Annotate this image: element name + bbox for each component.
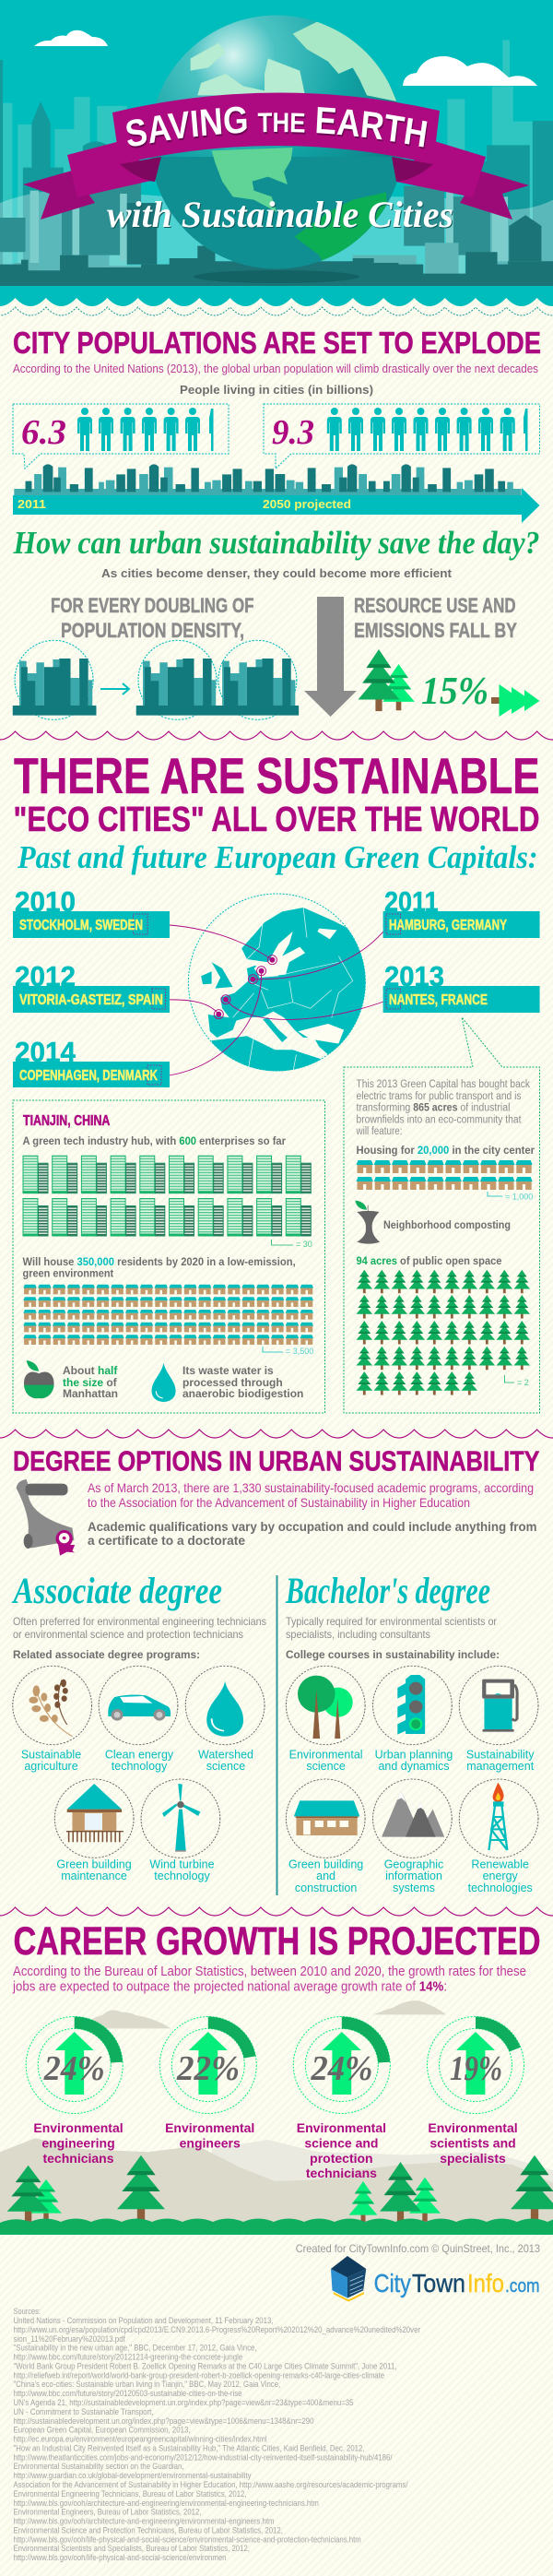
housing statement: Housing for 20,000 in the city center bbox=[356, 1144, 535, 1157]
job label 3: Environmental bbox=[297, 2120, 386, 2135]
logo bbox=[331, 2256, 540, 2302]
icon: apple core bbox=[355, 1201, 380, 1244]
career intro bbox=[12, 1965, 526, 1994]
label: sustainability management bbox=[466, 1749, 535, 1773]
icon: water drop bbox=[152, 1363, 176, 1402]
sources: http://www.bbc.com/future/story/20120503-sustainable-cities-on-the-rise bbox=[13, 2388, 241, 2398]
ring: 24 percent science technicians: 24% bbox=[311, 2049, 372, 2088]
apple text: Manhattan bbox=[63, 1387, 118, 1400]
job label 2 bbox=[165, 2120, 254, 2151]
apple text bbox=[63, 1364, 118, 1400]
map of Europe bbox=[188, 894, 367, 1073]
associate description bbox=[13, 1615, 266, 1641]
sources: http://www.bls.gov/ooh/architecture-and-engineering/environmental-engineers.htm bbox=[13, 2516, 275, 2525]
label: urban planning bbox=[375, 1749, 453, 1773]
icon: oil derrick with flame bbox=[459, 1779, 538, 1858]
sources: European Green Capital, European Commission, 2013, bbox=[13, 2424, 190, 2435]
label: environmental science: science bbox=[306, 1760, 346, 1773]
title: SAVING THE EARTH bbox=[126, 107, 428, 149]
clouds bbox=[34, 30, 537, 86]
icon: fuel pump bbox=[459, 1666, 538, 1745]
associate heading: Associate degree bbox=[11, 1570, 222, 1611]
heading bbox=[13, 747, 540, 839]
icon: trees bbox=[286, 1666, 365, 1745]
sources: Environmental Scientists and Specialists, Bureau of Labor Statistics, 2012, bbox=[13, 2543, 250, 2553]
green capital 2012: VITORIA-GASTEIZ, SPAIN bbox=[19, 992, 163, 1008]
label: green building construction: construction bbox=[295, 1882, 357, 1894]
icon: diploma scroll bbox=[17, 1479, 75, 1556]
logo wordmark bbox=[374, 2269, 540, 2297]
header: city skyline, globe and title ribbon bbox=[0, 0, 553, 306]
skyline bbox=[0, 40, 553, 286]
house legend bbox=[263, 1347, 313, 1356]
sources: Environmental Engineering Technicians, Bureau of Labor Statistics, 2012, bbox=[13, 2488, 247, 2499]
label: agriculture: Sustainable bbox=[21, 1749, 81, 1762]
section: city populations: 2050 projected bbox=[263, 497, 351, 511]
icon: half apple bbox=[24, 1360, 54, 1398]
house pictogram bbox=[23, 1285, 313, 1345]
green capital 2011: 2011 bbox=[384, 885, 439, 918]
Nantes description bbox=[356, 1079, 530, 1137]
water text bbox=[182, 1364, 303, 1400]
sources: "World Bank Group President Robert B. Zoellick Opening Remarks at the C40 Large Cities Climate Summit", June 2011, bbox=[13, 2361, 396, 2370]
housing pictogram bbox=[356, 1160, 533, 1190]
green capital 2012 bbox=[13, 960, 170, 1013]
label: agriculture bbox=[21, 1749, 81, 1773]
label: wind turbine: Wind turbine bbox=[149, 1858, 215, 1870]
career intro: jobs are expected to outpace the projected national average growth rate of 14%: bbox=[12, 1979, 447, 1994]
label: green building maintenance: Green building bbox=[56, 1858, 132, 1870]
label: green building construction: and bbox=[316, 1870, 335, 1882]
sources: sion_11%20February%202013.pdf bbox=[13, 2333, 125, 2344]
label: wind turbine: technology bbox=[154, 1870, 210, 1882]
Nantes description: electric trams for public transport and is bbox=[356, 1091, 522, 1102]
dashed scallop bbox=[0, 307, 553, 315]
label: environmental science: Environmental bbox=[289, 1749, 363, 1762]
label: geographic information systems: information bbox=[385, 1870, 442, 1882]
label: green building maintenance bbox=[56, 1858, 132, 1882]
panel: Nantes bbox=[344, 1017, 540, 1413]
apple text: the size of bbox=[63, 1376, 118, 1389]
column: bachelor's degree bbox=[285, 1570, 538, 1894]
section: eco cities bbox=[13, 747, 540, 1413]
qualification note bbox=[88, 1519, 536, 1548]
bachelor description: Typically required for environmental scientists or bbox=[286, 1615, 497, 1628]
degree intro bbox=[88, 1480, 534, 1510]
ring: 24 percent technicians: 24% bbox=[43, 2049, 105, 2088]
sources: http://www.un.org/esa/population/cpd/cpd2013/E.CN9.2013.6-Progress%20Report%202012%20_advance%20unedited%20ver bbox=[13, 2324, 420, 2334]
house legend: = 3,500 bbox=[286, 1347, 313, 1356]
building legend: = 30 bbox=[296, 1240, 312, 1249]
column: associate degree bbox=[11, 1570, 266, 1882]
timeline labels: 2011 bbox=[18, 497, 46, 511]
ribbon bbox=[23, 92, 529, 220]
label: clean energy: technology bbox=[112, 1760, 168, 1773]
icon: stilt house bbox=[54, 1779, 134, 1858]
timeline arrow bbox=[13, 488, 540, 523]
green capital 2010: 2010 bbox=[15, 885, 76, 918]
density statement bbox=[51, 594, 254, 642]
globe shadow on ground bbox=[194, 270, 359, 283]
label: environmental science bbox=[289, 1749, 363, 1773]
callout 2011 bbox=[13, 404, 229, 469]
sources: Sources: bbox=[13, 2306, 41, 2316]
Nantes description: will feature: bbox=[356, 1126, 402, 1137]
housing legend: = 1,000 bbox=[505, 1192, 533, 1201]
Nantes description: brownfields into an eco-community that bbox=[356, 1114, 522, 1125]
job label 1: engineering bbox=[41, 2136, 115, 2151]
sources: http://www.guardian.co.uk/global-development/environmental-sustainability bbox=[13, 2470, 252, 2480]
bachelor description bbox=[286, 1615, 497, 1641]
job label 1: technicians bbox=[42, 2151, 114, 2166]
Nantes description: transforming 865 acres of industrial bbox=[356, 1103, 511, 1114]
icon: green building bbox=[286, 1779, 365, 1858]
job label 3: science and bbox=[304, 2136, 378, 2151]
callout 2011: 6.3 bbox=[21, 413, 66, 452]
enterprises statement: A green tech industry hub, with 600 enterprises so far bbox=[22, 1134, 286, 1147]
ring: 24 percent science technicians bbox=[293, 2016, 390, 2114]
column divider bbox=[276, 1575, 278, 1895]
label: geographic information systems: systems bbox=[393, 1882, 435, 1894]
label: renewable energy: technologies bbox=[468, 1882, 533, 1894]
sources: UN's Agenda 21, http://sustainabledevelopment.un.org/index.php?page=view&nr=23&type=400&menu=35 bbox=[13, 2397, 354, 2407]
label: green building construction: Green building bbox=[288, 1858, 363, 1870]
sources: "Sustainability in the new urban age," BBC, December 17, 2012, Gaia Vince, bbox=[13, 2343, 256, 2352]
label: renewable energy bbox=[468, 1858, 533, 1894]
globe bbox=[147, 15, 406, 272]
label: renewable energy: Renewable bbox=[471, 1858, 529, 1870]
green capital 2010 bbox=[13, 885, 170, 938]
label: wind turbine bbox=[149, 1858, 215, 1882]
sources: United Nations - Commission on Population and Development, 11 February 2013, bbox=[13, 2315, 273, 2325]
header teal background bbox=[0, 0, 553, 306]
logo wordmark: Info bbox=[467, 2269, 504, 2297]
associate list heading: Related associate degree programs: bbox=[13, 1648, 200, 1661]
green capital 2012: 2012 bbox=[15, 960, 76, 992]
callout 2050 bbox=[264, 404, 540, 469]
label: green building maintenance: maintenance bbox=[61, 1870, 127, 1882]
section: degree options bbox=[11, 1444, 540, 1895]
label: watershed bbox=[198, 1749, 253, 1773]
green capital 2014: COPENHAGEN, DENMARK bbox=[19, 1068, 159, 1084]
panel: Tianjin bbox=[13, 1100, 324, 1413]
density statement: POPULATION DENSITY, bbox=[61, 619, 244, 642]
label: sustainability management: management bbox=[466, 1760, 535, 1773]
ring: 24 percent technicians bbox=[26, 2016, 123, 2114]
scallop divider bbox=[0, 1907, 553, 1916]
sources: http://www.bbc.com/future/story/20121214-greening-the-concrete-jungle bbox=[13, 2352, 242, 2361]
tree legend bbox=[505, 1375, 529, 1387]
tree pictogram bbox=[356, 1270, 530, 1395]
connectors and markers bbox=[147, 924, 387, 1076]
building pictogram bbox=[23, 1156, 311, 1236]
residents statement bbox=[22, 1255, 296, 1280]
callout 2050: 9.3 bbox=[272, 413, 314, 452]
big down arrow bbox=[304, 597, 357, 717]
green capital 2013: NANTES, FRANCE bbox=[389, 992, 488, 1008]
job label 3: technicians bbox=[306, 2166, 377, 2180]
associate description: Often preferred for environmental engineering technicians bbox=[13, 1615, 266, 1628]
label: green building construction bbox=[288, 1858, 363, 1894]
sources: http://www.theatlanticcities.com/jobs-and-economy/2012/12/how-industrial-city-reinvented-itself-sustainability-hub/4186/ bbox=[13, 2451, 393, 2463]
density statement: FOR EVERY DOUBLING OF bbox=[51, 594, 254, 617]
scallop divider bbox=[0, 731, 553, 740]
label: clean energy: Clean energy bbox=[105, 1749, 174, 1762]
density city illustrations bbox=[13, 640, 299, 719]
job label 3: protection bbox=[310, 2151, 373, 2166]
housing legend bbox=[488, 1192, 533, 1201]
sources: http://reliefweb.int/report/world/world-bank-group-president-robert-b-zoellick-opening-remarks-c40-large-cities-climate bbox=[13, 2370, 384, 2380]
sources: Environmental Sustainability section on the Guardian, bbox=[13, 2461, 184, 2471]
job label 4: scientists and bbox=[429, 2136, 516, 2151]
qualification note: a certificate to a doctorate bbox=[88, 1533, 245, 1548]
bachelor list heading: College courses in sustainability include: bbox=[286, 1648, 500, 1661]
water text: processed through bbox=[182, 1376, 283, 1389]
sources: Association for the Advancement of Sustainability in Higher Education, http://www.aashe.org/resources/academic-programs/ bbox=[13, 2479, 408, 2489]
open space statement: 94 acres of public open space bbox=[356, 1254, 502, 1267]
sources: http://www.bls.gov/ooh/life-physical-and-social-science/environmen bbox=[13, 2552, 227, 2562]
degree intro: to the Association for the Advancement of Sustainability in Higher Education bbox=[88, 1495, 470, 1510]
section: city populations bbox=[13, 326, 541, 719]
icon: water drop bbox=[185, 1666, 265, 1745]
sources: http://sustainabledevelopment.un.org/index.php?page=view&type=1006&menu=1348&nr=290 bbox=[13, 2416, 313, 2426]
green capital 2011 bbox=[383, 885, 540, 938]
subtitle: with Sustainable Cities bbox=[107, 194, 453, 235]
building legend bbox=[271, 1240, 312, 1249]
green capital 2011: HAMBURG, GERMANY bbox=[389, 918, 507, 933]
ring: 22 percent engineers bbox=[159, 2016, 256, 2114]
job label 4 bbox=[428, 2120, 518, 2166]
sources: "China's eco-cities: Sustainable urban living in Tianjin," BBC, May 2012, Gaia Vince, bbox=[13, 2379, 280, 2389]
label: urban planning: and dynamics bbox=[378, 1760, 450, 1773]
qualification note: Academic qualifications vary by occupation and could include anything from bbox=[88, 1519, 536, 1534]
label: urban planning: Urban planning bbox=[375, 1749, 453, 1762]
logo wordmark: Town bbox=[412, 2269, 465, 2297]
icon: wheat bbox=[13, 1666, 92, 1745]
label: geographic information systems: Geographic bbox=[384, 1858, 443, 1870]
icon: wind turbine bbox=[141, 1779, 220, 1858]
question subtext: As cities become denser, they could become more efficient bbox=[101, 567, 453, 580]
resource statement bbox=[354, 594, 517, 642]
associate description: or environmental science and protection technicians bbox=[13, 1628, 243, 1641]
ring: 19 percent scientists bbox=[428, 2016, 524, 2114]
section: career growth bbox=[0, 1919, 553, 2235]
resource statement: EMISSIONS FALL BY bbox=[354, 619, 517, 642]
sources: UN - Commitment to Sustainable Transport, bbox=[13, 2406, 153, 2416]
sources: http://www.bls.gov/ooh/life-physical-and-social-science/environmental-science-and-protection-technicians.htm bbox=[13, 2534, 361, 2544]
green capital 2014: 2014 bbox=[15, 1036, 76, 1068]
sources: http://ec.europa.eu/environment/europeangreencapital/winning-cities/index.html bbox=[13, 2433, 267, 2444]
label: geographic information systems bbox=[384, 1858, 443, 1894]
label: agriculture: agriculture bbox=[24, 1760, 78, 1773]
logo icon: building bbox=[331, 2256, 366, 2302]
residents statement: green environment bbox=[22, 1267, 113, 1280]
timeline skyline bbox=[14, 464, 522, 495]
job label 3 bbox=[297, 2120, 386, 2180]
sources: "How an Industrial City Reinvented Itself as a Sustainability Hub," The Atlantic Cities, Kaid Benfield, Dec. 2012, bbox=[13, 2442, 365, 2453]
apple text: About half bbox=[63, 1364, 118, 1377]
residents statement: Will house 350,000 residents by 2020 in a low-emission, bbox=[22, 1255, 296, 1268]
sources: http://www.bls.gov/ooh/architecture-and-engineering/environmental-engineering-technicians.htm bbox=[13, 2498, 319, 2508]
water text: Its waste water is bbox=[182, 1364, 274, 1377]
job label 4: specialists bbox=[440, 2151, 506, 2166]
label: watershed: Watershed bbox=[198, 1749, 253, 1762]
icon: fallen tree bbox=[491, 684, 540, 717]
label: renewable energy: energy bbox=[483, 1870, 519, 1882]
job label 1: Environmental bbox=[33, 2120, 124, 2135]
scallop divider bbox=[0, 1430, 553, 1438]
icon: mountains bbox=[373, 1779, 452, 1858]
label: clean energy bbox=[105, 1749, 174, 1773]
bachelor heading: Bachelor's degree bbox=[285, 1570, 490, 1611]
composting label: Neighborhood composting bbox=[383, 1218, 511, 1231]
tree legend: = 2 bbox=[517, 1378, 529, 1387]
ring: 19 percent scientists: 19% bbox=[450, 2049, 502, 2088]
green capital 2010: STOCKHOLM, SWEDEN bbox=[19, 918, 143, 933]
green capital 2013 bbox=[383, 960, 540, 1013]
sources: Environmental Science and Protection Technicians, Bureau of Labor Statistics, 2012, bbox=[13, 2525, 283, 2534]
job label 4: Environmental bbox=[428, 2120, 518, 2135]
job label 2: engineers bbox=[180, 2136, 241, 2151]
chart title: People living in cities (in billions) bbox=[180, 384, 373, 397]
sources bbox=[13, 2306, 420, 2562]
panel heading: TIANJIN, CHINA bbox=[23, 1113, 110, 1129]
icon: car bbox=[99, 1666, 178, 1745]
bachelor description: specialists, including consultants bbox=[286, 1628, 430, 1641]
15 percent: 15% bbox=[421, 671, 488, 713]
landscape bbox=[0, 2000, 553, 2235]
icon: traffic light bbox=[373, 1666, 452, 1745]
logo wordmark: .com bbox=[505, 2276, 540, 2297]
label: sustainability management: Sustainability bbox=[466, 1749, 535, 1762]
logo wordmark: City bbox=[374, 2269, 411, 2297]
sources: Environmental Engineers, Bureau of Labor Statistics, 2012, bbox=[13, 2507, 201, 2516]
icon: trees bbox=[358, 649, 415, 711]
green capital 2013: 2013 bbox=[384, 960, 444, 992]
water text: anaerobic biodigestion bbox=[182, 1387, 303, 1400]
ring: 22 percent engineers: 22% bbox=[176, 2049, 240, 2088]
job label 1 bbox=[33, 2120, 124, 2166]
label: watershed: science bbox=[206, 1760, 245, 1773]
job label 2: Environmental bbox=[165, 2120, 254, 2135]
green capital 2014 bbox=[13, 1036, 170, 1087]
Nantes description: This 2013 Green Capital has bought back bbox=[356, 1079, 530, 1090]
